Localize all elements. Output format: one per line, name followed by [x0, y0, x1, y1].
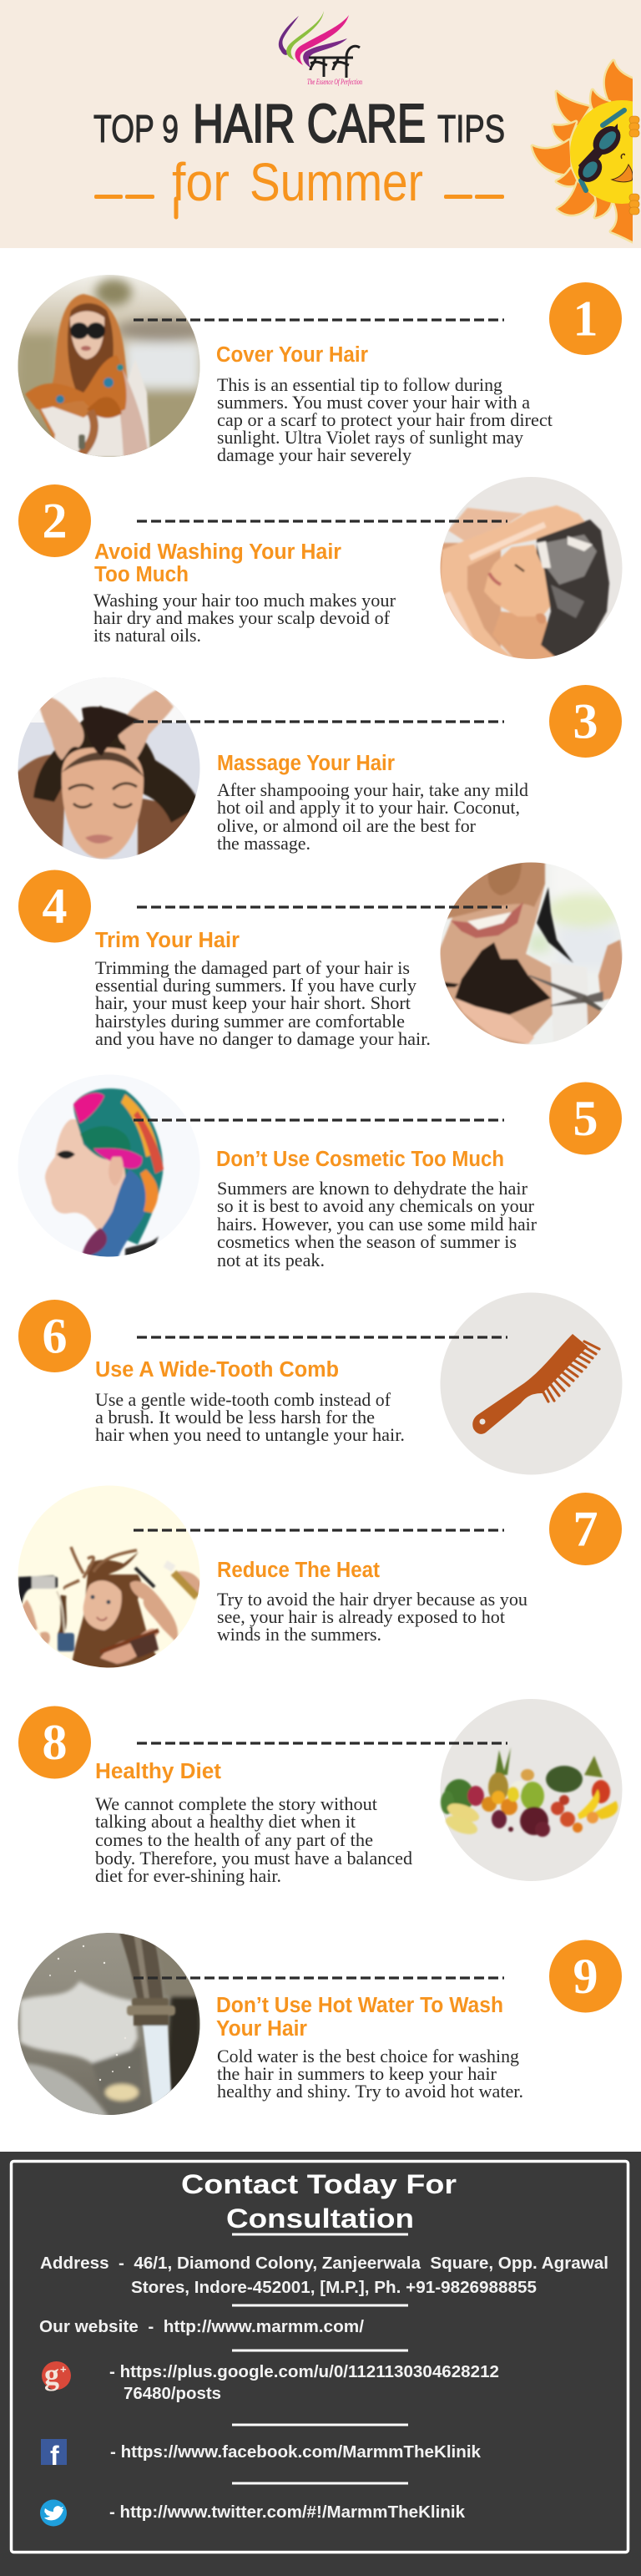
dashed connector	[137, 520, 507, 523]
number badge 4: 4	[42, 879, 67, 934]
icon: facebook: f	[50, 2441, 59, 2471]
number badge 3: 3	[573, 693, 598, 748]
icon: sun fingers	[629, 116, 639, 215]
dashed connector	[137, 1742, 507, 1745]
icon: twitter	[40, 2499, 67, 2526]
panel: tip 8	[18, 1699, 623, 1886]
body text: the massage.	[217, 833, 310, 854]
body text: its natural oils.	[93, 625, 201, 646]
number badge 4	[18, 870, 91, 942]
number badge 8	[18, 1706, 91, 1779]
body text: cap or a scarf to protect your hair from direct	[217, 409, 553, 430]
panel: tip 3	[17, 677, 622, 862]
body text: healthy and shiny. Try to avoid hot water.	[217, 2081, 523, 2102]
number badge 8: 8	[42, 1715, 67, 1770]
photo: woman in headscarf	[17, 274, 209, 459]
number badge 6	[18, 1300, 91, 1372]
photo: trimming hair	[439, 860, 626, 1048]
body text	[217, 1589, 527, 1645]
number badge 2	[18, 484, 91, 557]
panel: tip 5	[17, 1073, 622, 1270]
body text: cosmetics when the season of summer is	[217, 1231, 517, 1252]
heading: Contact Today For	[181, 2169, 457, 2199]
number badge 6: 6	[42, 1308, 67, 1363]
heading: Use A Wide-Tooth Comb	[95, 1358, 339, 1382]
dashed connector	[134, 720, 504, 723]
heading	[181, 2169, 457, 2234]
heading: Don’t Use Cosmetic Too Much	[216, 1148, 504, 1171]
body text: hairstyles during summer are comfortable	[95, 1011, 405, 1032]
dashed connector	[137, 1336, 507, 1339]
body text: summers. You must cover your hair with a	[217, 392, 530, 413]
heading: Don’t Use Hot Water To Wash	[216, 1994, 503, 2017]
heading: Massage Your Hair	[217, 752, 395, 775]
number badge 2: 2	[42, 493, 67, 548]
number badge 5: 5	[573, 1091, 598, 1146]
body text: Cold water is the best choice for washing	[217, 2046, 519, 2066]
body text	[95, 1389, 405, 1445]
body text	[93, 590, 396, 646]
body text: diet for ever-shining hair.	[95, 1865, 281, 1886]
subtitle	[94, 152, 504, 217]
body text: Use a gentle wide-tooth comb instead of	[95, 1389, 391, 1410]
body text: the hair in summers to keep your hair	[217, 2063, 497, 2084]
body text: Summers are known to dehydrate the hair	[217, 1178, 527, 1199]
body text: hot oil and apply it to your hair. Coconut,	[217, 797, 520, 818]
body text: We cannot complete the story without	[95, 1793, 378, 1814]
photo: running tap	[17, 1931, 202, 2117]
heading: Cover Your Hair	[216, 343, 368, 367]
icon: google plus: g	[44, 2358, 59, 2391]
body text	[217, 1178, 537, 1270]
logo tagline: The Essence Of Perfection	[307, 78, 362, 87]
body text	[217, 779, 528, 854]
body text	[95, 1793, 412, 1886]
photo: wide-tooth comb	[441, 1293, 623, 1475]
number badge 7	[549, 1493, 622, 1565]
photo: heat styling	[17, 1484, 202, 1671]
heading: Reduce The Heat	[217, 1559, 380, 1582]
body text: hair when you need to untangle your hair.	[95, 1424, 405, 1445]
website: Our website - http://www.marmm.com/	[39, 2317, 364, 2336]
body text: This is an essential tip to follow during	[217, 374, 502, 395]
body text: Trimming the damaged part of your hair is	[95, 957, 410, 978]
number badge 1: 1	[573, 291, 598, 346]
heading	[94, 540, 341, 586]
number badge 5	[549, 1083, 622, 1154]
body text: Try to avoid the hair dryer because as you	[217, 1589, 527, 1610]
title: HAIR CARE	[193, 93, 426, 154]
body text: winds in the summers.	[217, 1624, 381, 1645]
body text: and you have no danger to damage your hair.	[95, 1028, 431, 1049]
photo: woman shampooing	[439, 476, 624, 662]
icon: google plus: +	[60, 2363, 67, 2376]
heading: Consultation	[226, 2203, 414, 2234]
body text	[95, 957, 431, 1049]
heading: Healthy Diet	[95, 1760, 222, 1783]
body text: hair dry and makes your scalp devoid of	[93, 607, 390, 628]
panel: tip 1	[17, 274, 622, 465]
heading: Too Much	[94, 563, 189, 586]
body text	[217, 2046, 523, 2102]
icon: comb	[472, 1334, 599, 1434]
icon: facebook	[41, 2439, 67, 2471]
twitter link: - http://www.twitter.com/#!/MarmmTheKlinik	[109, 2502, 466, 2522]
body text	[217, 374, 553, 465]
number badge 3	[549, 685, 622, 758]
body text: damage your hair severely	[217, 444, 412, 465]
subtitle: Summer	[250, 152, 423, 212]
body text: see, your hair is already exposed to hot	[217, 1606, 506, 1627]
panel: tip 6	[18, 1293, 623, 1475]
body text: body. Therefore, you must have a balanced	[95, 1848, 412, 1869]
heading: Avoid Washing Your Hair	[94, 540, 341, 564]
header band	[0, 0, 641, 248]
body text: not at its peak.	[217, 1250, 325, 1270]
number badge 9: 9	[573, 1949, 598, 2004]
google plus link: 76480/posts	[124, 2384, 221, 2403]
panel: tip 2	[18, 476, 624, 662]
icon: sun with sunglasses	[532, 61, 641, 243]
heading: Trim Your Hair	[95, 929, 240, 952]
body text: Washing your hair too much makes your	[93, 590, 396, 611]
body text: sunlight. Ultra Violet rays of sunlight may	[217, 427, 524, 448]
address	[40, 2254, 608, 2297]
dashed connector	[134, 1529, 504, 1532]
number badge 1	[549, 282, 622, 355]
dashed connector	[134, 1976, 504, 1980]
body text: After shampooing your hair, take any mild	[217, 779, 528, 800]
heading: Your Hair	[216, 2017, 307, 2041]
photo: fruit and vegetables	[441, 1699, 623, 1881]
address: Stores, Indore-452001, [M.P.], Ph. +91-9826988855	[131, 2278, 537, 2297]
title: TIPS	[437, 107, 505, 150]
google plus link: - https://plus.google.com/u/0/1121130304628212	[109, 2362, 499, 2381]
title: TOP 9	[93, 107, 179, 150]
number badge 7: 7	[573, 1502, 598, 1557]
body text: a brush. It would be less harsh for the	[95, 1407, 375, 1427]
body text: hair, your must keep your hair short. Short	[95, 992, 411, 1013]
dashed connector	[134, 318, 504, 322]
body text: comes to the health of any part of the	[95, 1829, 373, 1850]
dashed connector	[137, 905, 507, 909]
icon: google plus	[42, 2358, 71, 2391]
number badge 9	[549, 1940, 622, 2013]
body text: olive, or almond oil are the best for	[217, 815, 476, 836]
dashed connector	[134, 1118, 504, 1122]
logo wordmark	[309, 46, 360, 78]
panel: contact footer	[0, 2152, 641, 2576]
body text: essential during summers. If you have curly	[95, 975, 417, 996]
heading	[216, 1994, 503, 2041]
panel: tip 4	[18, 860, 626, 1049]
subtitle: for	[172, 152, 230, 212]
facebook link: - https://www.facebook.com/MarmmTheKlinik	[110, 2442, 482, 2462]
panel: tip 7	[17, 1484, 622, 1671]
address: Address - 46/1, Diamond Colony, Zanjeerwala Square, Opp. Agrawal	[40, 2254, 608, 2273]
panel: tip 9	[17, 1931, 622, 2117]
body text: so it is best to avoid any chemicals on your	[217, 1195, 534, 1216]
sun sunglasses	[573, 110, 626, 190]
photo: rainbow braided hair	[43, 1086, 165, 1256]
google plus link	[109, 2362, 499, 2403]
logo	[279, 11, 362, 87]
body text: talking about a healthy diet when it	[95, 1811, 356, 1832]
photo: scalp massage	[17, 677, 202, 862]
body text: hairs. However, you can use some mild hair	[217, 1214, 537, 1235]
